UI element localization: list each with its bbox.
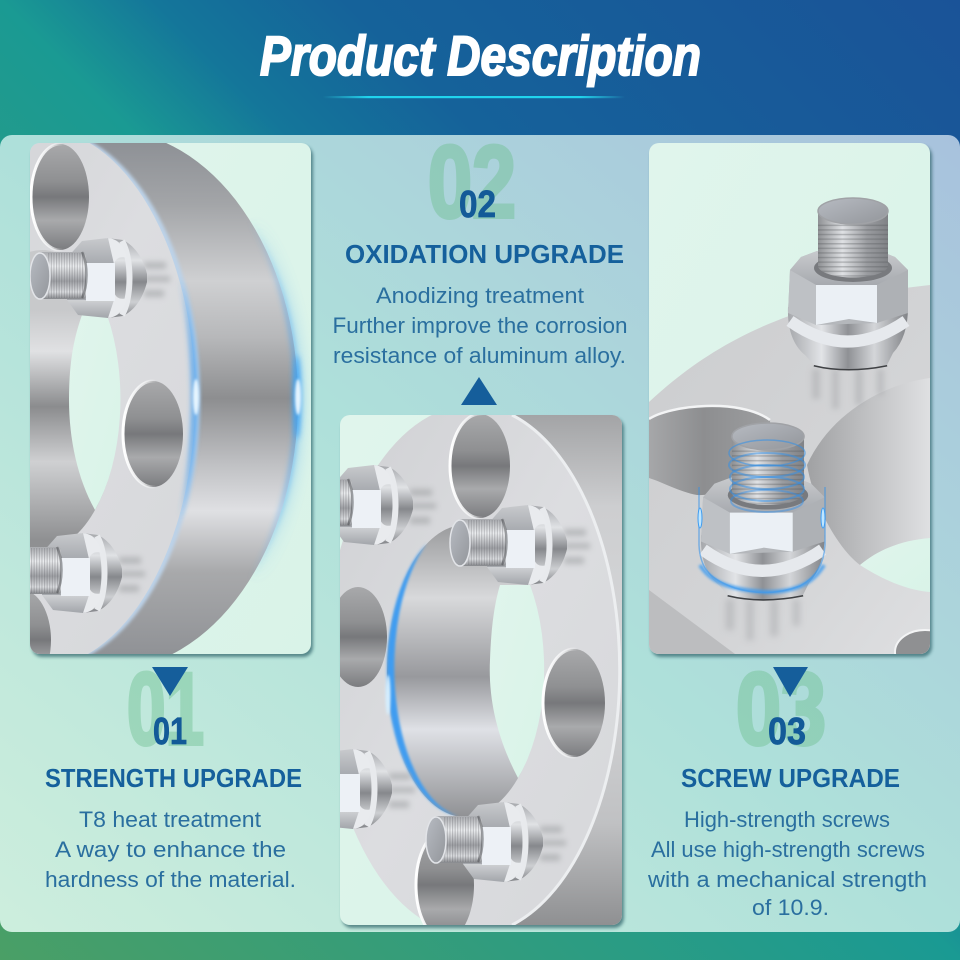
number 02: 02: [459, 184, 496, 226]
arrow up: [461, 377, 497, 405]
body text: with a mechanical strength: [647, 867, 927, 892]
arrow down: [152, 667, 188, 696]
icon: bolt hole right: [543, 649, 605, 757]
body text: hardness of the material.: [45, 867, 296, 892]
body text: T8 heat treatment: [79, 807, 261, 832]
icon: bolt hole bottom: [414, 842, 474, 925]
title: Product Description: [260, 24, 701, 87]
icon: bolt hole bottom: [30, 594, 51, 654]
section: oxidation upgrade: [332, 125, 628, 405]
panel: strength image: [30, 143, 316, 660]
panel: oxidation image: [340, 415, 626, 930]
number 03: 03: [768, 711, 806, 753]
glow highlights: [193, 355, 301, 439]
icon: bolt hole corner: [894, 629, 930, 654]
panel: screw image: [649, 143, 955, 674]
icon: nut upper: [30, 238, 170, 318]
icon: nut top left: [340, 465, 438, 545]
body text: Anodizing treatment: [376, 283, 584, 308]
icon: bolt hole left: [649, 406, 770, 495]
icon: upper nut and bolt: [788, 198, 908, 409]
icon: bolt hole top: [31, 144, 89, 250]
section: screw upgrade: [647, 652, 927, 920]
heading: STRENGTH UPGRADE: [45, 763, 302, 793]
icon: nut top right: [450, 505, 590, 585]
body text: [647, 807, 927, 920]
arrow down: [773, 667, 808, 697]
heading: OXIDATION UPGRADE: [345, 239, 624, 269]
body text: [45, 807, 296, 892]
ghost number 01: 01: [127, 652, 204, 766]
body text: A way to enhance the: [55, 837, 286, 862]
number 01: 01: [153, 711, 187, 753]
icon: nut bottom: [426, 802, 566, 882]
blue thread highlight: [698, 440, 825, 593]
body text: resistance of aluminum alloy.: [333, 343, 626, 368]
body text: [332, 283, 628, 368]
icon: bolt hole left: [340, 587, 387, 687]
ghost number 02: 02: [428, 125, 516, 239]
body text: Further improve the corrosion: [332, 313, 628, 338]
icon: lower nut and bolt: [701, 423, 825, 640]
body text: All use high-strength screws: [651, 837, 925, 862]
title underline: [323, 96, 625, 98]
section: strength upgrade: [45, 652, 302, 892]
icon: bolt hole top: [450, 414, 510, 518]
ghost number 03: 03: [736, 652, 826, 766]
icon: nut lower left: [340, 749, 416, 829]
icon: bolt hole middle: [123, 381, 183, 487]
body text: High-strength screws: [684, 807, 890, 832]
heading: SCREW UPGRADE: [681, 763, 900, 793]
icon: nut lower: [30, 533, 146, 613]
body text: of 10.9.: [752, 895, 829, 920]
